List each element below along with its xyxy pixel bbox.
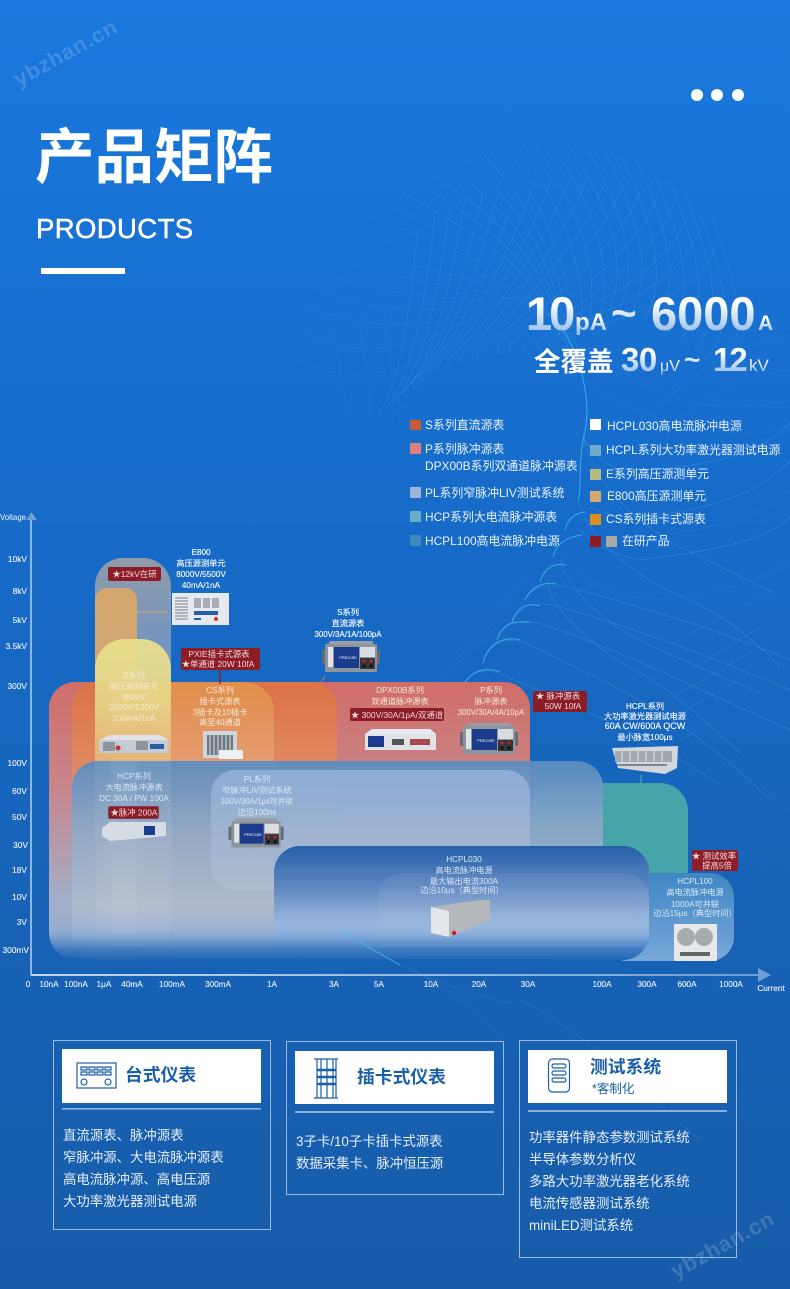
product label: CS series: 插卡式源表 (200, 696, 240, 706)
legend item: HCPL100: HCPL100高电流脉冲电源 (425, 534, 560, 548)
x-axis labels: 300mA (205, 980, 232, 989)
icon: card rack (314, 1059, 338, 1098)
device: E800 (172, 593, 229, 625)
axis: current arrow (758, 968, 771, 982)
x-axis labels: 10A (424, 980, 439, 989)
product label: E800: 40mA/1nA (182, 581, 221, 590)
device: P series: PRECISE (477, 738, 495, 743)
x-axis labels: 1000A (719, 980, 743, 989)
title: 产品矩阵 (35, 124, 273, 191)
panel header (62, 1049, 261, 1103)
band: S series orange (72, 682, 337, 958)
x-axis labels: 3A (329, 980, 340, 989)
x-axis labels: 300A (637, 980, 657, 989)
y-axis labels: 300V (7, 681, 27, 691)
product label: DPX00B: DPX00B系列 (376, 685, 424, 695)
tag: test efficiency: 提高5倍 (702, 860, 733, 870)
product label: E800: 8000V/5500V (176, 570, 226, 579)
product label: S series: S系列 (337, 607, 359, 617)
product label: HCPL series: 最小脉宽100μs (617, 732, 673, 742)
panel header: 台式仪表 (125, 1064, 196, 1085)
y-axis labels (0, 513, 29, 955)
product label: HCPL100 (653, 877, 737, 918)
legend item: HCPL: HCPL系列大功率激光器测试电源 (606, 443, 781, 457)
tag: test efficiency: ★ 测试效率 (692, 851, 736, 861)
legend item: S: S系列直流源表 (425, 418, 504, 432)
product label: HCPL100: 高电流脉冲电源 (666, 887, 724, 897)
band: P series red (49, 682, 530, 958)
product label: S series: 300V/3A/1A/100pA (314, 630, 382, 639)
y-axis labels: 8kV (13, 586, 27, 596)
headline: current range (526, 287, 773, 340)
band: CS series (111, 682, 274, 958)
panel header: 插卡式仪表 (357, 1067, 446, 1087)
panel: test systems (520, 1040, 736, 1258)
product label: E800: 高压源测单元 (176, 558, 226, 568)
band: E series yellow (95, 639, 171, 958)
y-axis labels: 3.5kV (6, 641, 27, 651)
y-axis labels: 3V (17, 917, 27, 927)
product label: DPX00B (371, 685, 429, 706)
headline: voltage range: ~ (684, 344, 700, 375)
product label: PL series: 100V/30A/1μs可并联 (221, 796, 293, 806)
device: S series: PRECISE (339, 655, 357, 660)
product label: P series (458, 685, 525, 717)
legend item: E: E系列高压源测单元 (606, 467, 709, 481)
product label: P series: 脉冲源表 (475, 696, 507, 706)
panel list (529, 1129, 690, 1233)
panel header (528, 1050, 727, 1103)
legend (410, 418, 781, 548)
product label: CS series (193, 685, 247, 727)
headline: current range: ~ (611, 289, 637, 338)
product label: HCP series: 大电流脉冲源表 (105, 782, 163, 792)
product label: E series: E系列 (123, 670, 145, 680)
product label: HCPL series: HCPL系列 (626, 701, 664, 711)
headline: voltage range: 30 (621, 341, 657, 378)
panel list: 半导体参数分析仪 (529, 1151, 636, 1167)
watermark bottom: ybzhan.cn (666, 1206, 779, 1283)
x-axis labels (26, 980, 785, 993)
device: HCPL series (612, 746, 678, 774)
panel list (296, 1134, 443, 1171)
headline: current range: A (758, 312, 773, 335)
product label: P series: 300V/30A/4A/10pA (458, 708, 525, 717)
product label: E series: 3500V (122, 693, 146, 702)
device: DPX00B (365, 729, 436, 750)
product label: HCP series: DC 30A / PW 100A (99, 794, 169, 803)
product label: PL series: 窄脉冲LIV测试系统 (222, 785, 292, 795)
chart: voltage-current matrix (0, 512, 785, 993)
panel list: 高电流脉冲源、高电压源 (63, 1171, 210, 1187)
product label: E series: 高压源测单元 (109, 681, 159, 691)
legend item: P and DPX: DPX00B系列双通道脉冲源表 (425, 459, 578, 473)
product label: HCP series (99, 771, 169, 803)
legend item: HCP: HCP系列大电流脉冲源表 (425, 510, 557, 524)
tag: pulse source (533, 691, 587, 712)
panel list: 数据采集卡、脉冲恒压源 (296, 1156, 443, 1171)
panel list: 3子卡/10子卡插卡式源表 (296, 1134, 443, 1149)
x-axis labels: 30A (521, 980, 536, 989)
x-axis labels: 20A (472, 980, 487, 989)
panel list: 多路大功率激光器老化系统 (529, 1173, 690, 1189)
product label: HCPL100: HCPL100 (677, 877, 713, 886)
tag: PXIE (181, 648, 260, 670)
product label: HCP series: HCP系列 (117, 771, 151, 781)
icon: benchtop instrument (77, 1063, 116, 1088)
product label: PL series: PL系列 (244, 774, 270, 784)
panel list: 直流源表、脉冲源表 (63, 1128, 184, 1143)
x-axis labels: 100mA (159, 980, 186, 989)
panel header: *客制化 (592, 1081, 635, 1096)
x-axis labels: 100nA (64, 980, 88, 989)
icon: test system (548, 1059, 570, 1092)
band: HCPL100 (603, 873, 734, 961)
product label: HCPL100: 边沿15μs（典型时间） (653, 908, 737, 918)
legend item: PL: PL系列窄脉冲LIV测试系统 (425, 486, 565, 500)
product label: PL series: 边沿100ns (238, 807, 276, 817)
panel: card instruments (286, 1042, 504, 1194)
product label: E series: 100mA/1nA (113, 714, 156, 723)
product label: CS series: 高至40通道 (199, 717, 241, 727)
panel list: 功率器件静态参数测试系统 (529, 1129, 690, 1145)
product label: HCPL series (604, 701, 686, 742)
x-axis labels: 40mA (121, 980, 143, 989)
tag: DPX00B: ★ 300V/30A/1pA/双通道 (351, 710, 444, 720)
product label: HCPL030: 高电流脉冲电源 (435, 865, 493, 875)
tag: pulse source: 50W 10fA (545, 701, 582, 711)
x-axis labels: 0 (26, 980, 31, 989)
panel: benchtop instruments (54, 1040, 270, 1230)
product label: E series: 2200V/1200V (109, 703, 159, 712)
tag: test efficiency (692, 850, 738, 871)
x-axis labels: 600A (677, 980, 697, 989)
y-axis labels: 18V (12, 865, 27, 875)
device: HCPL100 (674, 924, 717, 961)
band: E800 research gray (95, 558, 171, 960)
product label: PL series (221, 774, 293, 817)
device: HCPL030 (431, 900, 490, 937)
axis: voltage and current lines (26, 512, 758, 976)
bottom fade (49, 916, 649, 960)
band: HCPL laser teal (530, 783, 688, 960)
headline: current range: 10 (526, 287, 574, 340)
legend item: in development (590, 534, 670, 548)
panel header: 测试系统 (590, 1056, 661, 1077)
y-axis labels: 10kV (8, 554, 27, 564)
legend item: in development: 在研产品 (622, 534, 670, 548)
y-axis labels: 100V (7, 758, 27, 768)
band: E800 orange (95, 588, 137, 960)
device: PL series: PRECISE (244, 832, 262, 837)
product label: E series (109, 670, 159, 723)
y-axis labels: 30V (13, 840, 28, 850)
y-axis labels: 50V (12, 812, 27, 822)
panel header (295, 1051, 494, 1104)
watermark top: ybzhan.cn (9, 14, 122, 91)
x-axis labels: 10nA (39, 980, 59, 989)
tag: 12kV: ★12kV在研 (112, 569, 157, 579)
y-axis labels: Voltage (0, 513, 26, 522)
panel list: miniLED测试系统 (529, 1218, 633, 1233)
band: inner stripes (95, 761, 171, 958)
device: S series (322, 641, 380, 672)
product label: E800: E800 (191, 548, 211, 557)
headline: current range: pA (575, 309, 607, 336)
product label: HCPL series: 大功率激光器测试电源 (604, 711, 686, 721)
product label: HCPL030: HCPL030 (446, 855, 482, 864)
product label: HCPL030: 边沿10μs（典型时间） (420, 885, 504, 895)
x-axis labels: Current (757, 984, 785, 993)
band: PL series (211, 770, 530, 890)
panel list: 电流传感器测试系统 (529, 1195, 650, 1211)
x-axis labels: 1μA (97, 980, 112, 989)
device: E series (99, 735, 168, 753)
legend item: HCPL030: HCPL030高电流脉冲电源 (607, 419, 742, 433)
headline: voltage range: 12 (713, 341, 747, 378)
tag: pulse source: ★ 脉冲源表 (536, 691, 581, 701)
headline: voltage range (534, 341, 770, 378)
product label: CS series: CS系列 (206, 685, 234, 695)
product label: HCPL030 (420, 855, 504, 895)
y-axis labels: 60V (12, 786, 27, 796)
product label: DPX00B: 双通道脉冲源表 (371, 696, 429, 706)
y-axis labels: 10V (12, 892, 27, 902)
device: PL series (228, 818, 284, 847)
legend item: E800: E800高压源测单元 (607, 489, 706, 503)
tag: PXIE: PXIE插卡式源表 (189, 649, 250, 659)
panel list: 窄脉冲源、大电流脉冲源表 (63, 1149, 224, 1165)
device: P series (460, 723, 518, 754)
device: HCP series (102, 822, 166, 841)
product label: CS series: 3插卡及10插卡 (193, 707, 247, 717)
product label: S series (314, 607, 382, 639)
panel list (63, 1128, 224, 1209)
icon: three dots (691, 89, 744, 101)
headline: voltage range: kV (749, 356, 770, 375)
x-axis labels: 100A (592, 980, 612, 989)
tag: 12kV (108, 567, 161, 581)
product label: HCPL series: 60A CW/600A QCW (605, 721, 686, 731)
band: HCP series (72, 761, 603, 958)
y-axis labels: 5kV (13, 615, 27, 625)
headline: voltage range: 全覆盖 (534, 347, 614, 377)
device: CS series (203, 731, 243, 759)
legend item: CS: CS系列插卡式源表 (606, 512, 706, 526)
product label: S series: 直流源表 (332, 618, 364, 628)
band: HCPL030 (274, 846, 649, 959)
title underline (41, 268, 125, 274)
panel list: 大功率激光器测试电源 (63, 1193, 197, 1209)
band: HCPL030 inner (378, 873, 649, 959)
product label: HCPL100: 1000A可并联 (671, 899, 719, 909)
connector lines (136, 612, 641, 965)
x-axis labels: 1A (267, 980, 278, 989)
product label: HCPL030: 最大输出电流300A (430, 876, 499, 886)
subtitle: PRODUCTS (36, 213, 194, 244)
product label: E800 (176, 548, 226, 590)
product label: P series: P系列 (480, 685, 502, 695)
y-axis labels: 300mV (2, 945, 29, 955)
legend item: P and DPX (410, 442, 578, 473)
x-axis labels: 5A (374, 980, 385, 989)
tag: HCP pulse: ★脉冲 200A (110, 808, 158, 818)
headline: current range: 6000 (651, 287, 756, 340)
legend item: P and DPX: P系列脉冲源表 (425, 442, 504, 456)
tag: PXIE: ★单通道 20W 10fA (182, 659, 255, 669)
headline: voltage range: μV (660, 358, 680, 375)
